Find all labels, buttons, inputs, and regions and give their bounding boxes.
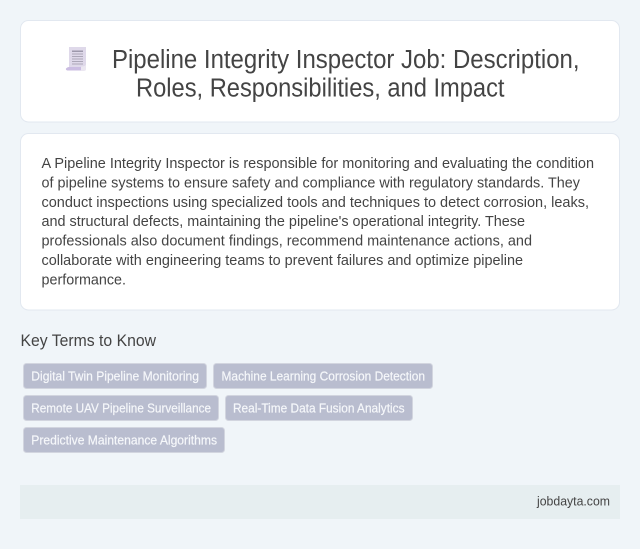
tag: digital twin: Digital Twin Pipeline Monitoring (31, 370, 199, 384)
text block: description paragraph: and structural defects, maintaining the pipeline's operational integrity. These (42, 214, 525, 230)
text block: description paragraph: of pipeline systems to ensure safety and compliance with regulatory standards. They (42, 176, 581, 192)
text block: description paragraph: performance. (42, 272, 126, 288)
icon: document scroll (66, 47, 86, 71)
tag: predictive maintenance (24, 428, 224, 452)
footer text: site name: jobdayta.com (536, 494, 610, 508)
panel: key term tags (24, 364, 432, 452)
tag: digital twin (24, 364, 206, 388)
heading: key terms: Key Terms to Know (20, 332, 156, 350)
text block: description paragraph: A Pipeline Integrity Inspector is responsible for monitoring and evaluating the condition (42, 156, 594, 172)
footer (20, 485, 620, 519)
heading: page title: Pipeline Integrity Inspector Job: Description, (112, 46, 580, 74)
tag: real-time data (226, 396, 412, 420)
heading: page title (112, 46, 580, 102)
tag: predictive maintenance: Predictive Maintenance Algorithms (31, 434, 217, 448)
panel: job description (20, 134, 620, 310)
heading: page title: Roles, Responsibilities, and Impact (136, 74, 504, 102)
text block: description paragraph (42, 156, 594, 288)
text block: description paragraph: collaborate with engineering teams to prevent failures and optimize pipeline (42, 253, 523, 269)
text block: description paragraph: professionals also document findings, recommend maintenance actions, and (42, 234, 532, 250)
text block: description paragraph: conduct inspections using specialized tools and techniques to detect corrosion, leaks, (42, 195, 589, 211)
panel: title header (20, 20, 620, 122)
tag: remote UAV (24, 396, 218, 420)
tag: remote UAV: Remote UAV Pipeline Surveillance (31, 402, 211, 416)
tag: machine learning: Machine Learning Corrosion Detection (222, 370, 425, 384)
tag: real-time data: Real-Time Data Fusion Analytics (233, 402, 404, 416)
tag: machine learning (214, 364, 432, 388)
